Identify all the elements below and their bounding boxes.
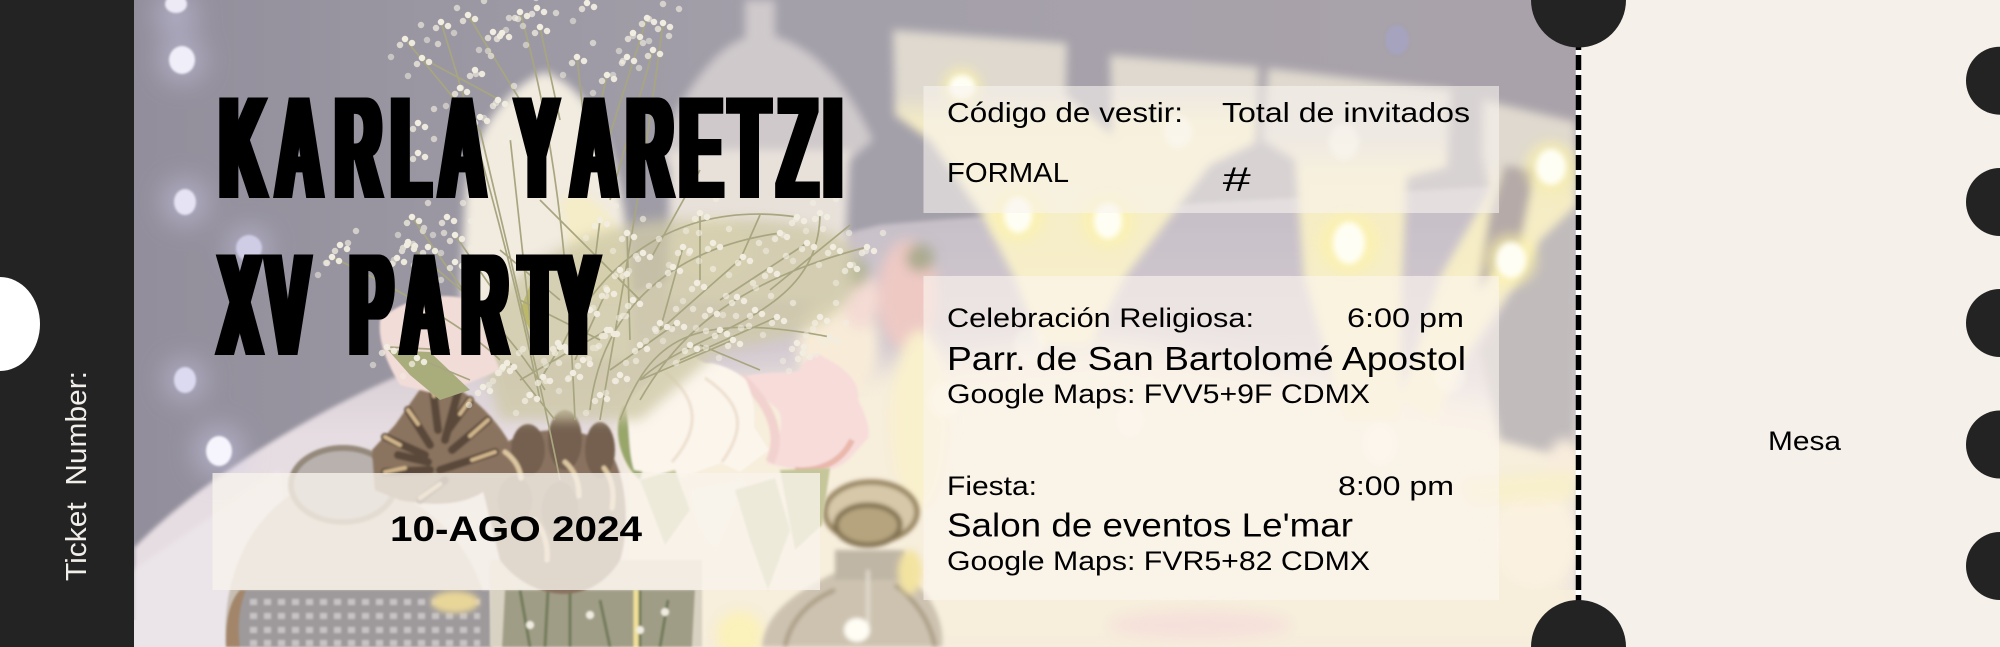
olive haze behind gypsophila (479, 219, 860, 420)
panel: dress code and guests: FORMAL (947, 157, 1069, 188)
vase (489, 588, 702, 647)
foliage under date (640, 468, 830, 590)
bottom perforation notch (1531, 600, 1626, 647)
panel: event details: Google Maps: FVR5+82 CDMX (947, 546, 1370, 576)
mesa label: Mesa (1768, 426, 1842, 456)
ticket number label: Ticket Number: (61, 371, 93, 581)
jar right (762, 482, 942, 647)
panel: event details: Parr. de San Bartolomé Apostol (947, 341, 1466, 378)
panel: dress code and guests: Código de vestir: (947, 97, 1183, 128)
panel: event details (924, 276, 1499, 600)
jar left (225, 448, 492, 647)
title: KARLA YARETZI (220, 65, 842, 229)
blurred table (134, 180, 1576, 647)
gaps in perforation line (1576, 50, 1581, 605)
panel: event details: 8:00 pm (1338, 471, 1454, 501)
top perforation notch (1531, 0, 1626, 48)
pink rose behind title (380, 296, 500, 395)
right edge notches (1966, 47, 2000, 600)
blurred lanterns (460, 0, 873, 360)
panel: event details: Google Maps: FVV5+9F CDMX (947, 379, 1370, 409)
roses (616, 353, 868, 480)
panel: date (212, 473, 820, 590)
gypsophila stems (332, 12, 867, 480)
lower right pale flowers (798, 240, 1583, 639)
glowing letter bulbs (716, 67, 1577, 647)
title: XV PARTY (219, 222, 599, 386)
pine cones (372, 375, 626, 594)
panel: event details: 6:00 pm (1347, 303, 1464, 333)
panel: event details: Fiesta: (947, 471, 1037, 501)
panel: event details: Salon de eventos Le'mar (947, 508, 1353, 544)
gypsophila blossoms (318, 0, 883, 413)
left notch (0, 277, 40, 371)
panel: date: 10-AGO 2024 (390, 510, 643, 549)
left dark band (0, 0, 134, 647)
panel: dress code and guests (924, 86, 1499, 213)
blurred marquee letters (893, 30, 1576, 460)
string light bokeh (156, 0, 269, 475)
panel: dress code and guests: Total de invitados (1222, 97, 1470, 128)
background photo: table centerpiece (134, 0, 1583, 647)
dashed perforation line (1576, 35, 1581, 605)
title (219, 65, 842, 386)
panel: dress code and guests: # (1222, 161, 1252, 199)
panel: event details: Celebración Religiosa: (947, 303, 1254, 333)
